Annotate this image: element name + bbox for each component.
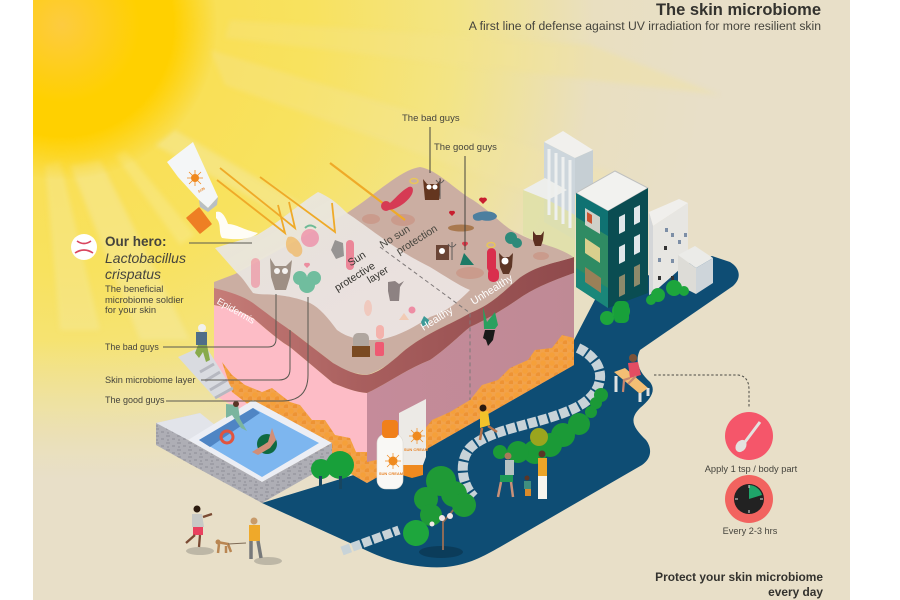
jogger	[186, 506, 214, 555]
icon: spoon	[725, 412, 773, 460]
garden shrubs	[493, 388, 608, 464]
large sunscreen tube: SUN CREAM	[404, 447, 429, 452]
large sunscreen tube	[399, 399, 429, 478]
sunscreen bottle	[377, 420, 404, 489]
healthy label: Healthy	[419, 304, 456, 334]
bad guys on unhealthy skin	[381, 178, 544, 282]
left callout: bad guys: The bad guys	[105, 342, 159, 352]
orange UV rays	[217, 163, 405, 233]
left callout: good guys	[105, 297, 308, 405]
top callout: bad guys: The bad guys	[402, 113, 460, 124]
teal apartment building	[576, 171, 648, 308]
dermis red band	[214, 257, 574, 393]
stairs landing	[178, 345, 233, 397]
hero heading	[105, 234, 186, 282]
hero leader line	[189, 242, 252, 244]
left callout: skin microbiome layer: Skin microbiome layer	[105, 375, 195, 385]
icon: clock	[725, 475, 773, 523]
dog walker	[249, 518, 282, 565]
hero heading: Our hero:	[105, 234, 167, 249]
sunscreen bottle: SUN CREAM	[379, 471, 404, 476]
right face of skin block	[367, 273, 574, 483]
dark blue ground path	[262, 256, 739, 567]
hero icon	[71, 234, 97, 260]
left callout: bad guys	[105, 294, 276, 352]
subtitle: A first line of defense against UV irradiation for more resilient skin	[469, 19, 821, 33]
bad guy on film	[270, 258, 292, 290]
apply label: Apply 1 tsp / body part	[705, 464, 798, 474]
running child	[480, 404, 497, 440]
stairs near block	[200, 364, 233, 398]
tree with blossoms	[403, 466, 476, 558]
stepping stones	[463, 348, 600, 497]
small white annex	[678, 246, 713, 294]
sunscreen film layer	[215, 192, 470, 340]
orange fat cells, left	[222, 362, 367, 483]
no sun protection label: No sun	[378, 223, 412, 251]
title: The skin microbiome	[656, 1, 821, 19]
sun	[33, 0, 223, 185]
skin block top surface	[214, 167, 573, 375]
sun protective layer label: protective	[333, 260, 378, 294]
family in the garden	[498, 450, 547, 499]
orange fat cells, right	[367, 335, 574, 483]
epidermis label: Epidermis	[215, 296, 257, 327]
sun protective layer label: Sun	[346, 249, 368, 269]
pale building behind	[523, 131, 593, 262]
woman on bench	[614, 354, 648, 402]
hero description	[105, 283, 184, 315]
bushes near pool	[311, 451, 354, 489]
hero description: microbiome soldier	[105, 294, 184, 305]
hero description: for your skin	[105, 304, 156, 315]
bushes by building	[600, 280, 689, 325]
top callout: good guys	[434, 142, 497, 250]
hero description: The beneficial	[105, 283, 163, 294]
every 2-3 hrs label: Every 2-3 hrs	[723, 526, 778, 536]
unhealthy label: Unhealthy	[469, 272, 516, 308]
cream splat	[216, 212, 258, 239]
left face of skin block	[214, 305, 367, 483]
white building right	[649, 199, 688, 295]
climber on skin wall	[483, 307, 498, 346]
pool	[156, 400, 332, 503]
closing message: Protect your skin microbiome	[655, 570, 823, 584]
hero heading: crispatus	[105, 266, 161, 282]
sunlight glow and beams	[33, 0, 709, 456]
top callout: bad guys	[402, 113, 460, 173]
sun burn spots	[362, 214, 549, 279]
sunscreen tube, floating	[167, 142, 218, 212]
left callout: good guys: The good guys	[105, 395, 165, 405]
left callout: skin microbiome layer	[105, 330, 290, 385]
dog	[216, 540, 246, 553]
faded microbes on lower film	[352, 281, 429, 357]
stair-walking person	[195, 324, 210, 362]
top callout: good guys: The good guys	[434, 142, 497, 153]
good guys on film	[251, 226, 354, 293]
sun protective layer label: layer	[365, 264, 391, 286]
dotted connector	[654, 375, 749, 408]
sun protective layer label	[333, 249, 391, 294]
closing message: every day	[768, 585, 823, 599]
sunscreen tube, floating: SUN	[197, 186, 206, 194]
hero heading: Lactobacillus	[105, 250, 186, 266]
dashed divider healthy / unhealthy	[380, 247, 470, 400]
closing message	[655, 570, 823, 599]
stepping stones lower	[342, 530, 399, 551]
tube cap	[187, 208, 211, 233]
no sun protection label: protection	[394, 223, 440, 257]
